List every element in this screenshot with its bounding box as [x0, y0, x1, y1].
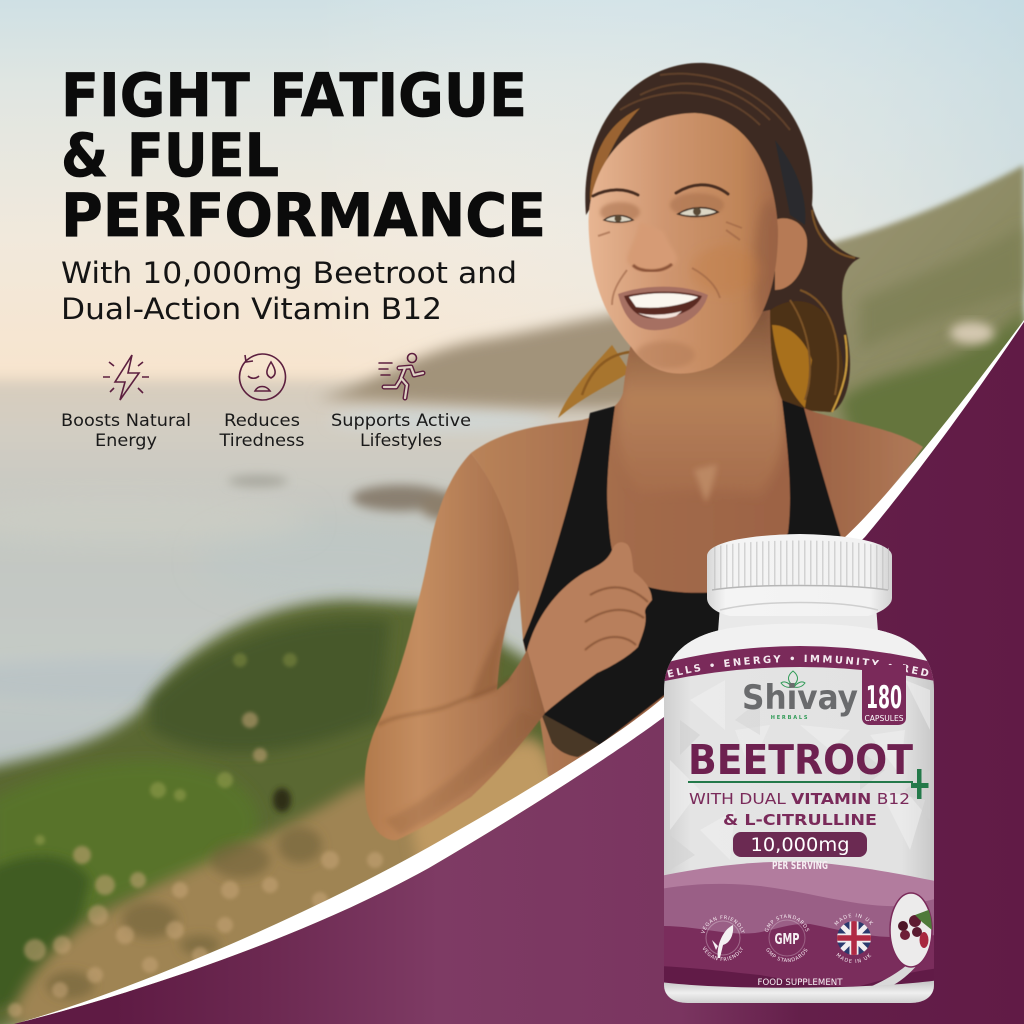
purple swoosh panel [14, 322, 1024, 1024]
woman: running arm [365, 453, 545, 840]
background: distant hills [315, 165, 1024, 470]
title: & FUEL [61, 121, 279, 191]
benefit: boosts natural energy [61, 355, 191, 450]
badge: GMP standards: GMP STANDARDS [764, 914, 810, 932]
woman: clenched fist [527, 542, 652, 713]
bottle: 180 capsules tag: 180 [866, 680, 902, 716]
background: sky [0, 0, 1024, 430]
bottle: maroon top band [664, 646, 934, 681]
background: sea [0, 380, 610, 810]
white swoosh stripe [14, 320, 1024, 1024]
bottle: maroon top band: RED CELLS • ENERGY • IMMUNITY • RED BLOOD [667, 654, 928, 678]
badge: made in UK flag [834, 914, 874, 963]
badge: vegan friendly [700, 915, 745, 962]
bottle: per serving: PER SERVING [772, 860, 828, 872]
woman: neck, shoulders and chest [471, 300, 923, 777]
label: supports active lifestyles: Lifestyles [360, 431, 442, 450]
label: boosts natural energy: Boosts Natural [61, 411, 191, 430]
icon: running person [379, 354, 423, 398]
bottle: Shivay logo: HERBALS [771, 715, 809, 721]
bottle: geometric label texture [670, 680, 930, 870]
badge: GMP standards [764, 914, 810, 962]
label: reduces tiredness: Tiredness [218, 431, 304, 450]
label: reduces tiredness [218, 411, 304, 450]
bottle: ingredients: WITH DUAL VITAMIN B12 [689, 790, 910, 808]
bottle: ingredients [689, 790, 910, 829]
photo: smiling woman running [365, 63, 923, 840]
bottle: dosage pill [733, 832, 867, 857]
bottle: white base [664, 980, 934, 1003]
bottle: purple waves [660, 862, 940, 1003]
bottle: 180 capsules tag [862, 665, 906, 725]
badge: vegan friendly: VEGAN FRIENDLY [700, 915, 745, 933]
bottle: body [664, 624, 934, 1003]
bottle: ingredients: & L-CITRULLINE [723, 811, 877, 829]
woman: face [589, 113, 807, 374]
background: out-of-focus highlights [8, 653, 383, 1017]
label: reduces tiredness: Reduces [224, 411, 300, 430]
bottle: neck [718, 605, 878, 632]
benefit: reduces tiredness [218, 354, 304, 450]
icon: lightning bolt [103, 355, 149, 400]
bottle: 180 capsules tag: CAPSULES [864, 714, 904, 723]
background: foreground shrubs and grass [0, 600, 575, 1024]
label: supports active lifestyles [331, 411, 471, 450]
label: supports active lifestyles: Supports Active [331, 411, 471, 430]
supplement bottle [664, 534, 934, 1003]
bottle: dosage pill: 10,000mg [750, 835, 850, 856]
benefit: supports active lifestyles [331, 354, 471, 450]
bottle: product name: BEETROOT [688, 736, 913, 784]
label: boosts natural energy: Energy [95, 431, 157, 450]
label: boosts natural energy [61, 411, 191, 450]
subtitle: With 10,000mg Beetroot and [61, 256, 517, 290]
badge: GMP standards: GMP [774, 930, 800, 948]
badge: made in UK flag: MADE IN UK [834, 914, 874, 926]
title [61, 61, 546, 251]
badge: made in UK flag: MADE IN UK [836, 952, 872, 963]
icon: tired face with sweat drop [239, 354, 285, 400]
subtitle: Dual-Action Vitamin B12 [61, 292, 442, 326]
badge: GMP standards: GMP STANDARDS [766, 948, 808, 962]
bottle: beetroot image oval [890, 893, 932, 967]
background: rocks on shore [228, 475, 470, 520]
badge: vegan friendly: VEGAN FRIENDLY [702, 946, 743, 962]
woman: black sports top [523, 400, 841, 757]
woman: hair and ponytail [558, 63, 860, 418]
subtitle [61, 256, 517, 326]
bottle: white shoulder [670, 624, 928, 662]
bottle: green line and plus [688, 769, 928, 799]
bottle: ribbed white cap [707, 534, 892, 616]
title: FIGHT FATIGUE [61, 61, 527, 131]
background: dark grass mottling [46, 827, 322, 999]
bottle: Shivay logo: Shivay [742, 678, 858, 718]
bottle: food supplement text: FOOD SUPPLEMENT [758, 978, 843, 988]
title: PERFORMANCE [61, 181, 546, 251]
